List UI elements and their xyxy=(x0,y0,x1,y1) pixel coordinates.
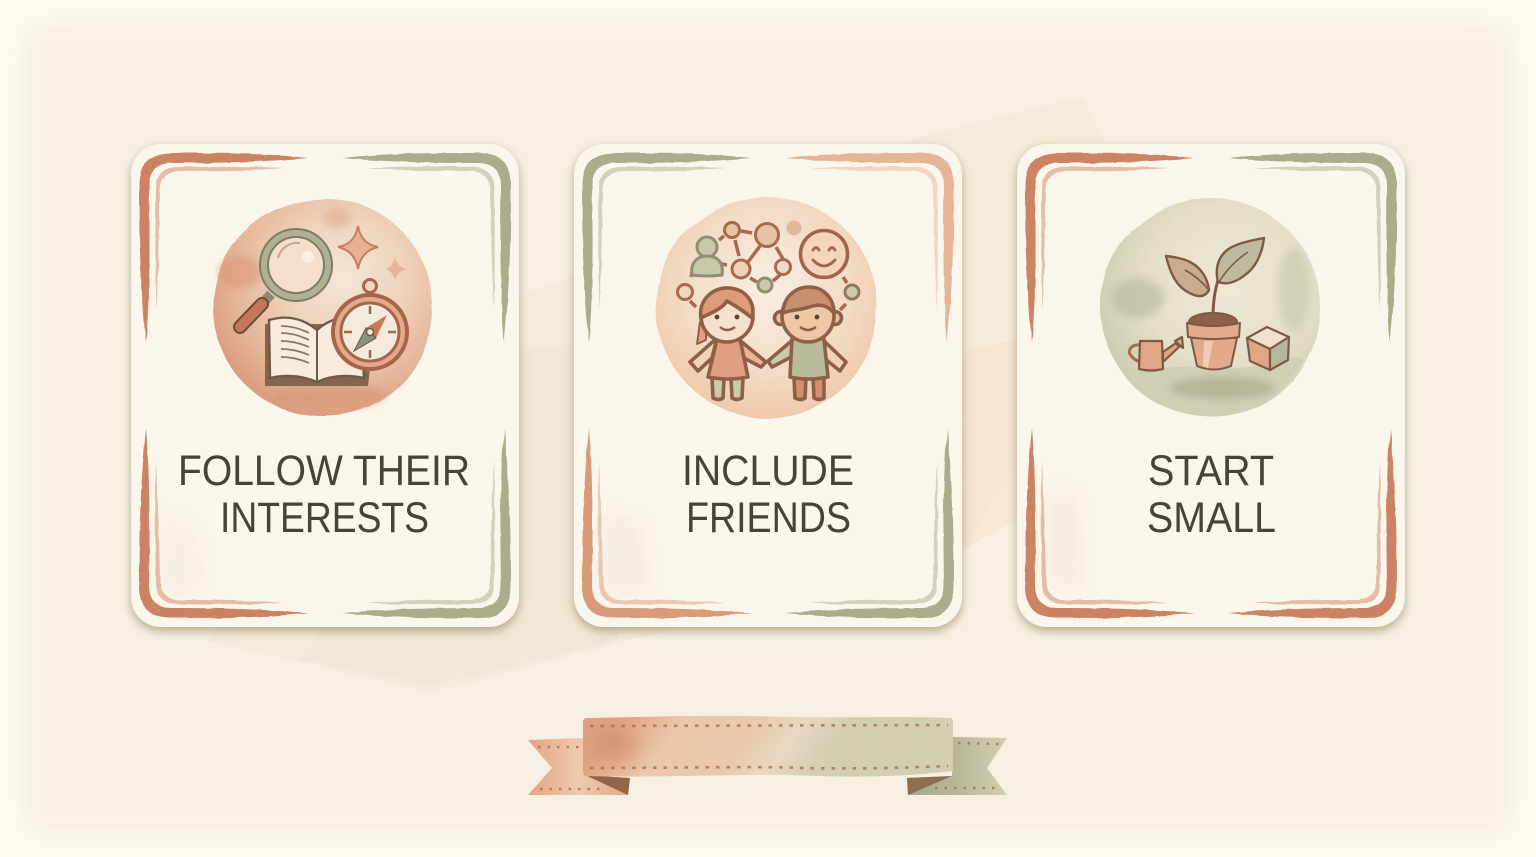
icon: magnifier, book and compass in peach circle xyxy=(213,199,432,416)
terracotta pot xyxy=(1187,313,1240,370)
watering can xyxy=(1129,337,1183,370)
icon: seedling, watering can and block xyxy=(1101,198,1320,417)
ribbon left fold xyxy=(585,775,630,795)
girl xyxy=(690,288,766,400)
compass xyxy=(333,280,407,369)
seedling xyxy=(1166,238,1264,316)
heading: follow their interests xyxy=(178,447,470,542)
heading: start small xyxy=(1147,447,1276,542)
card 1 frame xyxy=(139,153,511,618)
small sparkle xyxy=(385,257,407,281)
toy block xyxy=(1247,327,1289,370)
card 1 paper stain xyxy=(155,510,205,600)
ribbon left tail xyxy=(528,738,630,795)
person icon xyxy=(692,237,722,276)
card 3 paper stain xyxy=(1045,490,1085,590)
heading: follow their interests: INTERESTS xyxy=(220,494,429,542)
ribbon watercolor bloom xyxy=(593,729,637,761)
heading: include friends: FRIENDS xyxy=(686,494,851,542)
peach watercolor circle xyxy=(656,197,877,418)
network nodes xyxy=(678,220,859,300)
card 2 paper stain xyxy=(600,510,650,600)
friend network xyxy=(690,231,847,310)
heading: start small: SMALL xyxy=(1147,494,1276,542)
heading: start small: START xyxy=(1148,447,1274,495)
ribbon right tail xyxy=(907,737,1007,795)
heading: include friends: INCLUDE xyxy=(682,447,854,495)
heading: include friends xyxy=(682,447,854,542)
card 3: start small xyxy=(1017,144,1405,627)
card 2 frame xyxy=(582,153,954,618)
sage watercolor circle xyxy=(1101,198,1320,417)
magnifying glass xyxy=(240,233,328,327)
card 1 paper xyxy=(131,144,519,627)
ribbon right fold xyxy=(907,776,952,795)
large sparkle xyxy=(338,226,378,269)
icon: two friends with network xyxy=(656,197,877,418)
pot highlight xyxy=(1203,341,1213,368)
ribbon main band xyxy=(583,716,953,777)
open book xyxy=(265,317,370,386)
boy xyxy=(768,287,846,400)
card 1: follow their interests xyxy=(131,144,519,627)
card 2: include friends xyxy=(574,144,962,627)
card 3 frame xyxy=(1025,153,1397,618)
card 2 paper xyxy=(574,144,962,627)
peach watercolor circle xyxy=(213,199,432,416)
card 3 paper xyxy=(1017,144,1405,627)
smiley face xyxy=(800,230,848,278)
blank ribbon banner xyxy=(528,716,1007,795)
ribbon stitching xyxy=(538,725,1000,789)
background watercolor wash xyxy=(205,97,1110,692)
heading: follow their interests: FOLLOW THEIR xyxy=(178,447,470,495)
